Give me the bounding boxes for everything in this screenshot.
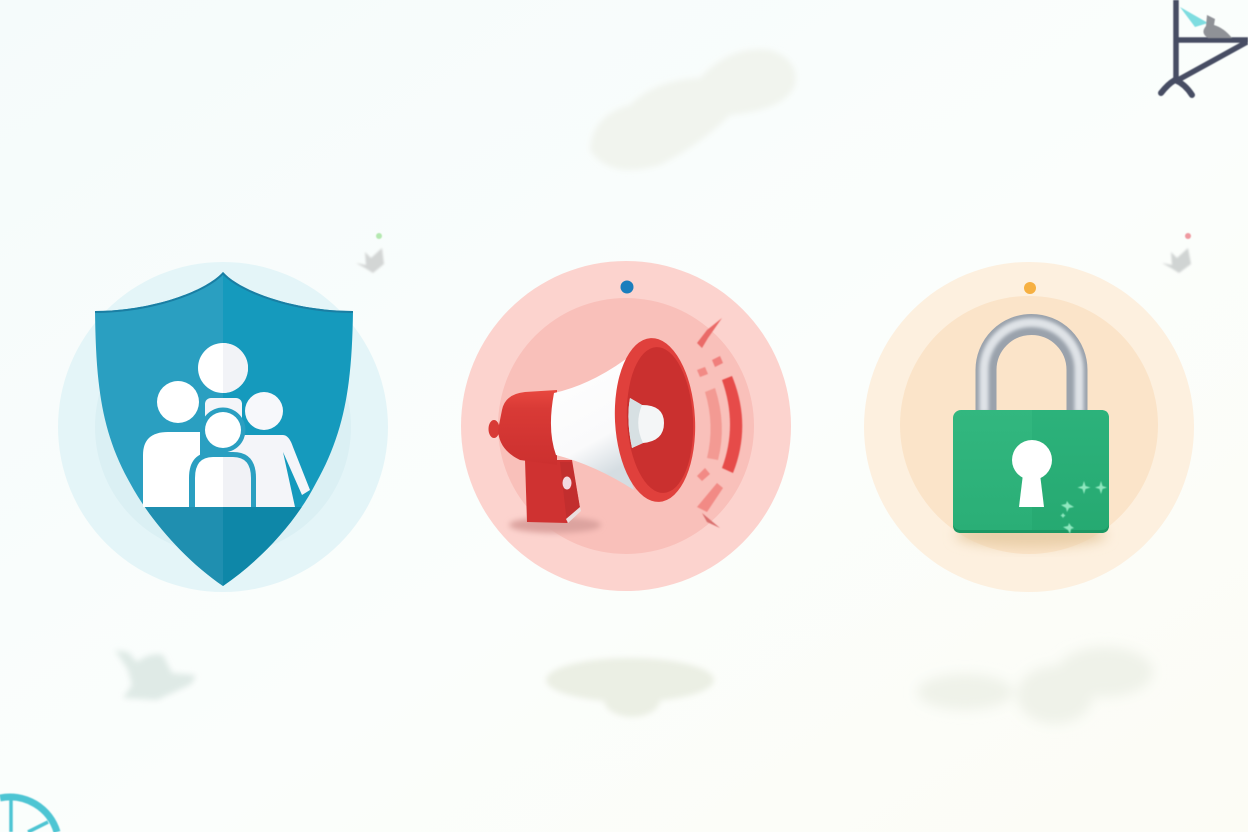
icon: pale blue circle backdrop	[58, 262, 388, 592]
driver	[628, 398, 664, 448]
background smudge: lower-right cloud	[917, 647, 1153, 724]
white horn	[551, 359, 634, 490]
child outline	[200, 408, 246, 452]
panel: public alert	[461, 261, 791, 591]
heads	[157, 381, 199, 423]
left adult	[143, 432, 200, 507]
icon: peach circle backdrop	[864, 262, 1194, 592]
lock body	[953, 410, 1109, 533]
icon: padlock	[953, 323, 1109, 534]
icon: red dot	[1185, 233, 1191, 239]
icon: sound waves	[697, 318, 742, 528]
icon: lock shadow	[955, 523, 1107, 547]
child	[205, 412, 241, 448]
icon: pink circle backdrop	[461, 261, 791, 591]
background smudge: lower-left cloud	[115, 650, 195, 700]
background smudge: lower-centre cloud	[546, 658, 714, 717]
icon: inner circle ring	[95, 299, 351, 555]
icon: green dot	[376, 233, 382, 239]
icon: megaphone	[488, 336, 699, 533]
icon: small bird right	[1162, 248, 1191, 273]
panel: family protection	[58, 262, 388, 592]
background smudge: top cloud	[590, 49, 796, 170]
keyhole	[1012, 440, 1052, 507]
icon: small bird left	[356, 248, 384, 273]
sparkles	[1060, 481, 1107, 534]
rear knob	[488, 420, 500, 438]
rear adult body	[205, 398, 242, 430]
bell rim	[611, 336, 699, 504]
icon: inner peach circle	[900, 296, 1158, 554]
icon: orange dot	[1024, 282, 1036, 294]
handle	[525, 460, 580, 523]
icon: corner scaffold top right	[1161, 0, 1248, 95]
icon: blue dot	[620, 280, 634, 294]
icon: family group	[143, 343, 310, 507]
shadow	[509, 517, 601, 533]
icon: shield	[90, 265, 358, 592]
icon: inner pink circle	[498, 298, 754, 554]
right adult	[225, 435, 310, 507]
icon: corner wheel bottom left	[0, 797, 57, 832]
rear body	[498, 390, 557, 465]
shackle	[984, 323, 1079, 412]
panel: security lock	[864, 262, 1194, 592]
